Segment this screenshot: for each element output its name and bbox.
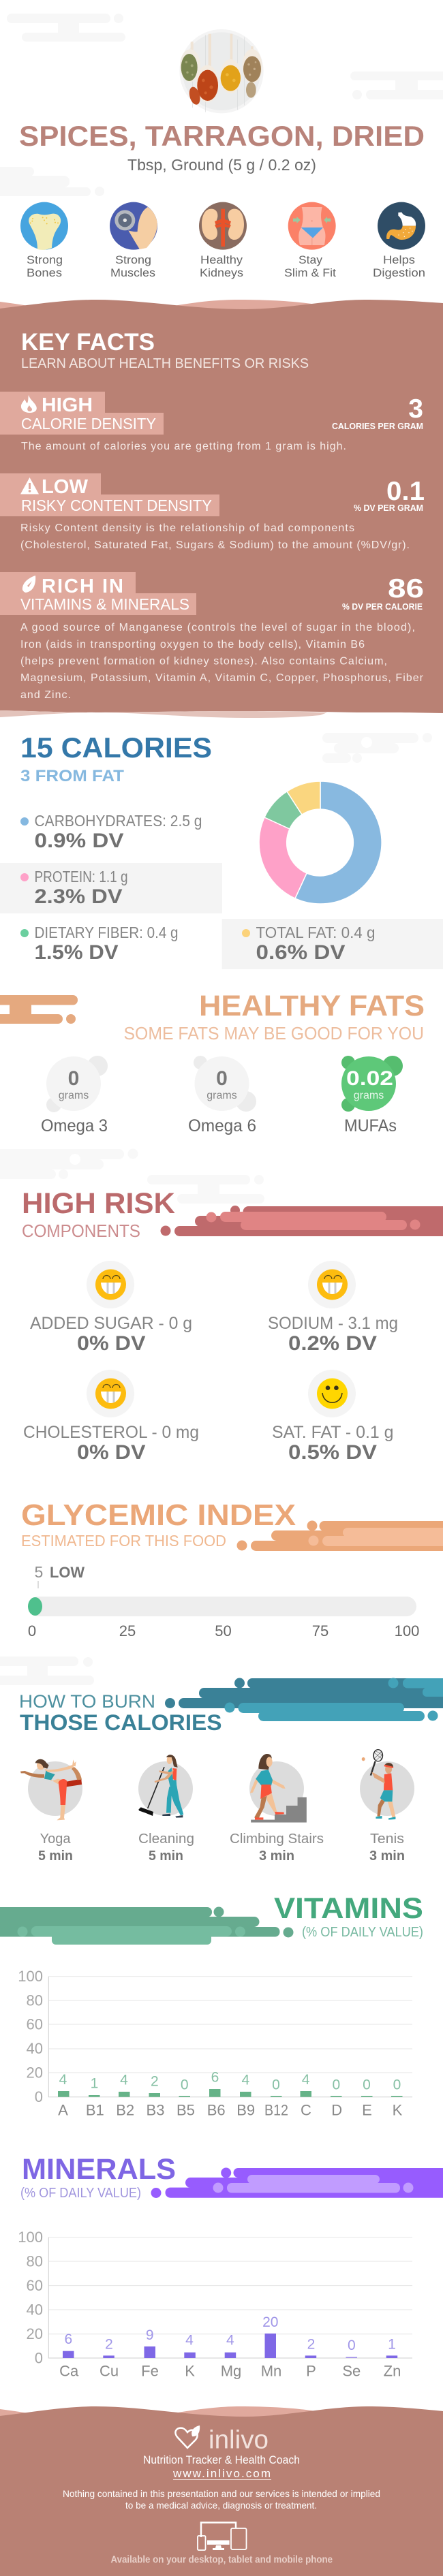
- benefit icon: healthy kidneys: Healthy: [200, 253, 243, 266]
- activity: yoga: [20, 1759, 82, 1864]
- bar chart: minerals: 2: [105, 2336, 113, 2353]
- bar chart: minerals: 9: [146, 2327, 154, 2343]
- fact: high calorie density: [0, 392, 423, 452]
- legend: carbohydrates: CARBOHYDRATES: 2.5 g: [34, 812, 202, 830]
- bar chart: vitamins: B5: [177, 2102, 195, 2119]
- fact: low risky content density: RISKY CONTENT DENSITY: [21, 497, 212, 514]
- bar chart: minerals: 40: [27, 2301, 43, 2319]
- benefit icon: helps digestion: [373, 202, 425, 279]
- bar chart: minerals: 4: [226, 2332, 234, 2349]
- bar chart: minerals: Mg: [221, 2363, 241, 2380]
- stat: omega 3: Omega 3: [41, 1116, 108, 1135]
- decorative cloud: minerals: [151, 2167, 443, 2198]
- heading: minerals: MINERALS: [22, 2153, 176, 2186]
- heading: those calories: THOSE CALORIES: [20, 1710, 222, 1735]
- bar chart: vitamins: 0: [363, 2077, 371, 2093]
- benefit icon: stay slim and fit: Stay: [299, 253, 322, 266]
- gauge: glycemic index: [28, 1563, 419, 1639]
- stat: omega 3: 0: [68, 1067, 79, 1090]
- decorative cloud top right: [350, 72, 443, 99]
- fact: rich in vitamins and minerals: [0, 572, 424, 701]
- logo: inlivo: [175, 2425, 269, 2455]
- activity: climbing stairs: Climbing Stairs: [230, 1832, 324, 1847]
- activity: climbing stairs: [230, 1754, 324, 1864]
- disclaimer: Nothing contained in this presentation and our services is intended or implied: [63, 2488, 380, 2499]
- activity: climbing stairs: 3 min: [259, 1849, 294, 1864]
- legend: protein: [0, 863, 222, 913]
- risk: saturated fat: SAT. FAT - 0.1 g: [272, 1423, 394, 1442]
- subheading: healthy fats: SOME FATS MAY BE GOOD FOR YOU: [124, 1023, 424, 1043]
- bar chart: minerals: 6: [64, 2331, 72, 2347]
- activity: cleaning: Cleaning: [138, 1832, 194, 1847]
- photo: spices on wooden spoons: [179, 29, 264, 113]
- heading: glycemic index: GLYCEMIC INDEX: [21, 1498, 296, 1532]
- fact: rich in vitamins and minerals: Iron (aids in transporting oxygen to the body cells), Vitamin B6: [20, 639, 365, 650]
- bar chart: minerals: Zn: [384, 2363, 401, 2380]
- bar chart: minerals: 20: [27, 2325, 43, 2342]
- decorative cloud: burn calories: [165, 1678, 443, 1721]
- bar chart: minerals: Mn: [261, 2363, 281, 2380]
- heading: key facts: KEY FACTS: [21, 329, 155, 356]
- fact: high calorie density: CALORIES PER GRAM: [332, 422, 423, 431]
- decorative clouds above high risk: [0, 1148, 264, 1204]
- subheading: glycemic index: ESTIMATED FOR THIS FOOD: [21, 1532, 226, 1550]
- stat: MUFAs: MUFAs: [344, 1116, 397, 1135]
- bar chart: minerals: Cu: [100, 2363, 119, 2380]
- gauge: glycemic index: 50: [215, 1622, 232, 1639]
- subheading: minerals: (% OF DAILY VALUE): [20, 2186, 141, 2201]
- bar chart: minerals: P: [306, 2363, 316, 2380]
- fact: high calorie density: The amount of calories you are getting from 1 gram is high.: [21, 441, 346, 452]
- risk: cholesterol: [23, 1370, 199, 1464]
- legend: total fat: TOTAL FAT: 0.4 g: [256, 924, 375, 941]
- activity: yoga: 5 min: [38, 1849, 73, 1864]
- bar chart: minerals: 60: [27, 2277, 43, 2294]
- bar chart: minerals: Se: [342, 2363, 361, 2380]
- decorative cloud left: [0, 167, 104, 196]
- stat: omega 3: grams: [59, 1090, 89, 1101]
- bar chart: vitamins: 0: [181, 2077, 189, 2093]
- legend: carbohydrates: [20, 812, 202, 852]
- bar chart: vitamins: 4: [302, 2072, 310, 2088]
- bar chart: vitamins: 0: [35, 2088, 43, 2105]
- fact: rich in vitamins and minerals: and Zinc.: [20, 689, 71, 701]
- bar chart: vitamins: 2: [151, 2074, 159, 2090]
- fact: high calorie density: HIGH: [42, 394, 93, 416]
- legend: dietary fiber: 1.5% DV: [34, 941, 119, 964]
- stat: omega 6: grams: [207, 1090, 237, 1101]
- risk: sodium: 0.2% DV: [288, 1332, 377, 1355]
- decorative cloud bottom of glycemic: [0, 1656, 94, 1685]
- legend: dietary fiber: [20, 924, 179, 964]
- bar chart: vitamins: 1: [91, 2076, 98, 2092]
- bar chart: vitamins: 0: [333, 2077, 340, 2093]
- decorative cloud: healthy fats: [0, 995, 78, 1024]
- bar chart: vitamins: B6: [207, 2102, 226, 2119]
- bar chart: vitamins: C: [301, 2102, 311, 2119]
- legend: total fat: 0.6% DV: [256, 941, 345, 964]
- benefit icon: strong bones: Bones: [27, 266, 62, 279]
- disclaimer: to be a medical advice, diagnosis or treatment.: [125, 2500, 317, 2511]
- icon: warning triangle: [20, 477, 39, 494]
- stat: omega 6: Omega 6: [188, 1116, 256, 1135]
- activity: tennis: Tenis: [370, 1832, 404, 1847]
- risk: saturated fat: 0.5% DV: [288, 1441, 377, 1464]
- activity: yoga: Yoga: [40, 1832, 71, 1847]
- decorative cloud top left: [7, 14, 125, 42]
- bar chart: vitamins: 4: [59, 2072, 67, 2088]
- legend: total fat: [222, 919, 443, 969]
- bar chart: vitamins: 4: [241, 2073, 249, 2088]
- subheading: components: COMPONENTS: [22, 1221, 140, 1241]
- bar chart: vitamins: B9: [236, 2102, 255, 2119]
- fact: rich in vitamins and minerals: RICH IN: [42, 576, 123, 597]
- risk: saturated fat: [272, 1370, 394, 1464]
- bar chart: vitamins: 0: [393, 2077, 401, 2093]
- risk: added sugar: [30, 1261, 192, 1355]
- gauge: glycemic index: LOW: [50, 1564, 85, 1581]
- activity: cleaning: [138, 1755, 194, 1864]
- bar chart: minerals: 20: [262, 2314, 278, 2330]
- fact: rich in vitamins and minerals: 86: [388, 574, 424, 603]
- heading: healthy fats: HEALTHY FATS: [199, 990, 425, 1022]
- gauge: glycemic index: 100: [395, 1622, 419, 1639]
- heading: how to burn: HOW TO BURN: [19, 1691, 155, 1712]
- bar chart: minerals: Fe: [141, 2363, 159, 2380]
- bar chart: minerals: 0: [35, 2350, 43, 2366]
- bar chart: vitamins: B3: [147, 2102, 164, 2119]
- risk: added sugar: ADDED SUGAR - 0 g: [30, 1314, 192, 1333]
- panel: footer: [0, 2406, 443, 2576]
- fact: high calorie density: 3: [408, 394, 423, 424]
- benefit icon: strong bones: Strong: [27, 253, 63, 266]
- risk: added sugar: 0% DV: [77, 1332, 146, 1355]
- bar chart: minerals: 0: [348, 2338, 356, 2353]
- benefit icon: helps digestion: Helps: [383, 253, 415, 266]
- bar chart: vitamins: B2: [116, 2102, 134, 2119]
- benefit icon: healthy kidneys: Kidneys: [200, 266, 243, 279]
- bar chart: vitamins: A: [58, 2102, 68, 2119]
- subtitle: serving size: Tbsp, Ground (5 g / 0.2 oz): [127, 156, 316, 174]
- bar chart: vitamins: K: [393, 2102, 403, 2119]
- availability note: Available on your desktop, tablet and mobile phone: [110, 2554, 333, 2565]
- tagline: Nutrition Tracker & Health Coach: [143, 2453, 300, 2466]
- benefit icon: strong bones: [20, 202, 68, 279]
- gauge: glycemic index: 25: [119, 1622, 136, 1639]
- bar chart: vitamins: 20: [27, 2064, 43, 2082]
- bar chart: minerals: [18, 2229, 412, 2380]
- benefit icon: healthy kidneys: [199, 202, 247, 279]
- decorative cloud: high risk: [161, 1206, 443, 1236]
- heading: vitamins: VITAMINS: [274, 1892, 423, 1925]
- fact: rich in vitamins and minerals: (helps prevent formation of kidney stones). Also contains Calcium,: [20, 655, 387, 667]
- subheading: LEARN ABOUT HEALTH BENEFITS OR RISKS: [21, 356, 309, 371]
- fact: low risky content density: % DV PER GRAM: [354, 503, 423, 513]
- bar chart: minerals: K: [185, 2363, 195, 2380]
- stat: omega 6: 0: [216, 1067, 228, 1090]
- bar chart: minerals: 2: [307, 2336, 315, 2353]
- stat: MUFAs: 0.02: [346, 1067, 393, 1090]
- title: SPICES, TARRAGON, DRIED: [19, 120, 425, 152]
- donut chart: macronutrients: [259, 781, 382, 904]
- risk: sodium: [268, 1261, 398, 1355]
- bar chart: vitamins: B12: [264, 2102, 288, 2119]
- gauge: glycemic index: 5: [34, 1563, 43, 1581]
- fact: low risky content density: 0.1: [386, 477, 425, 506]
- bar chart: minerals: Ca: [59, 2363, 79, 2380]
- bar chart: minerals: 80: [27, 2253, 43, 2269]
- decorative cloud: vitamins: [0, 1907, 293, 1945]
- fact: high calorie density: CALORIE DENSITY: [21, 415, 156, 433]
- legend: dietary fiber: DIETARY FIBER: 0.4 g: [34, 924, 179, 941]
- bar chart: vitamins: 0: [272, 2077, 280, 2093]
- risk: sodium: SODIUM - 3.1 mg: [268, 1314, 398, 1333]
- stat: MUFAs: [341, 1056, 403, 1135]
- subheading: from fat: 3 FROM FAT: [20, 767, 124, 785]
- benefit icon: stay slim and fit: Slim & Fit: [284, 266, 336, 279]
- bar chart: minerals: 100: [18, 2229, 43, 2246]
- benefit icon: helps digestion: Digestion: [373, 266, 425, 279]
- bar chart: vitamins: 80: [27, 1992, 43, 2009]
- heading: high risk: HIGH RISK: [22, 1187, 175, 1220]
- fact: rich in vitamins and minerals: A good source of Manganese (controls the level of sugar in the blood),: [20, 622, 415, 633]
- fact: low risky content density: Risky Content density is the relationship of bad components: [20, 522, 354, 534]
- stat: omega 6: [188, 1056, 256, 1135]
- fact: rich in vitamins and minerals: Magnesium, Potassium, Vitamin A, Vitamin C, Copper, Phosphorus, Fiber: [20, 672, 424, 684]
- stat: omega 3: [41, 1056, 108, 1135]
- risk: cholesterol: CHOLESTEROL - 0 mg: [23, 1423, 199, 1442]
- activity: tennis: 3 min: [369, 1849, 405, 1864]
- website link: www.inlivo.com: [172, 2467, 271, 2480]
- bar chart: vitamins: 4: [120, 2073, 128, 2088]
- icon: flame: [21, 395, 37, 413]
- fact: rich in vitamins and minerals: % DV PER CALORIE: [342, 602, 423, 612]
- gauge: glycemic index: 0: [28, 1622, 36, 1639]
- fact: rich in vitamins and minerals: VITAMINS & MINERALS: [20, 595, 189, 613]
- benefit icon: strong muscles: Muscles: [110, 266, 155, 279]
- bar chart: vitamins: 60: [27, 2016, 43, 2032]
- benefit icon: stay slim and fit: [284, 202, 336, 279]
- bar chart: vitamins: D: [331, 2102, 342, 2119]
- heading: calories: 15 CALORIES: [20, 732, 212, 764]
- legend: protein: PROTEIN: 1.1 g: [34, 868, 128, 885]
- icon: devices: [198, 2523, 247, 2550]
- activity: cleaning: 5 min: [149, 1849, 183, 1864]
- bar chart: vitamins: 6: [211, 2070, 219, 2086]
- bar chart: vitamins: [18, 1968, 412, 2119]
- bar chart: vitamins: 40: [27, 2040, 43, 2057]
- bar chart: vitamins: 100: [18, 1968, 43, 1985]
- logo: inlivo: inlivo: [209, 2426, 269, 2455]
- activity: tennis: [360, 1750, 414, 1864]
- bar chart: minerals: 4: [185, 2332, 194, 2349]
- panel: key facts: [0, 300, 443, 718]
- fact: low risky content density: [0, 473, 425, 551]
- disclaimer: [63, 2488, 380, 2511]
- bar chart: vitamins: E: [362, 2102, 372, 2119]
- stat: MUFAs: grams: [354, 1090, 384, 1101]
- fact: low risky content density: LOW: [42, 476, 89, 498]
- legend: protein: 2.3% DV: [34, 885, 123, 908]
- bar chart: minerals: 1: [388, 2336, 396, 2353]
- fact: low risky content density: (Cholesterol, Saturated Fat, Sugars & Sodium) to the amount (%DV/gr).: [20, 539, 410, 551]
- legend: carbohydrates: 0.9% DV: [34, 830, 124, 852]
- decorative cloud calories: [322, 733, 432, 763]
- icon: leaf: [22, 576, 35, 593]
- benefit icon: strong muscles: Strong: [115, 253, 151, 266]
- risk: cholesterol: 0% DV: [77, 1441, 146, 1464]
- decorative cloud: glycemic index: [237, 1520, 443, 1551]
- bar chart: vitamins: B1: [86, 2102, 104, 2119]
- subheading: vitamins: (% OF DAILY VALUE): [302, 1925, 423, 1940]
- gauge: glycemic index: 75: [312, 1622, 329, 1639]
- benefit icon: strong muscles: [110, 202, 157, 279]
